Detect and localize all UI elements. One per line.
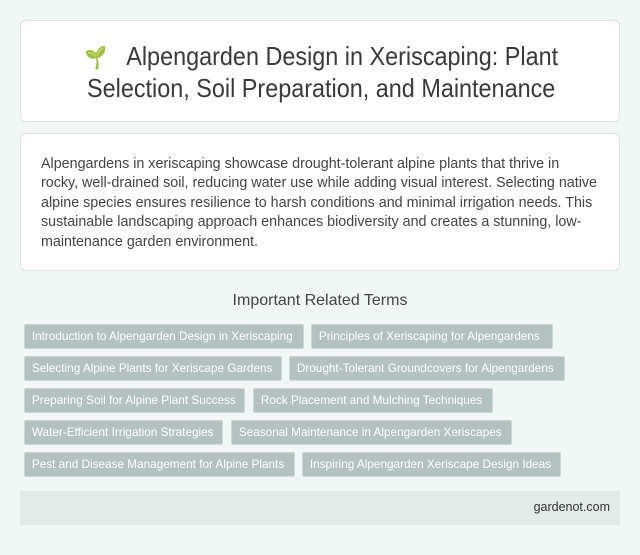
title: Alpengarden Design in Xeriscaping: Plant <box>127 41 558 71</box>
description card <box>20 133 620 271</box>
tag 7: Water-Efficient Irrigation Strategies <box>32 425 214 439</box>
title: Selection, Soil Preparation, and Maintenance <box>87 73 555 103</box>
tag 2: Principles of Xeriscaping for Alpengardens <box>319 329 540 343</box>
tag 6: Rock Placement and Mulching Techniques <box>261 393 482 407</box>
tag 9 <box>24 452 295 477</box>
tag 10 <box>302 452 561 477</box>
tag 6 <box>253 388 493 413</box>
tag 3 <box>24 356 282 381</box>
footer site name: gardenot.com <box>534 500 610 514</box>
tag 4 <box>289 356 565 381</box>
tag 1 <box>24 324 304 349</box>
tag 1: Introduction to Alpengarden Design in Xeriscaping <box>32 329 293 343</box>
description text: rocky, well-drained soil, reducing water use while adding visual interest. Selecting native <box>41 175 597 191</box>
tag 7 <box>24 420 223 445</box>
tag 9: Pest and Disease Management for Alpine Plants <box>32 457 284 471</box>
related terms heading: Important Related Terms <box>233 292 407 309</box>
footer <box>20 491 620 525</box>
description text <box>41 156 597 250</box>
tag 2 <box>311 324 553 349</box>
tag 3: Selecting Alpine Plants for Xeriscape Gardens <box>32 361 272 375</box>
tag 8: Seasonal Maintenance in Alpengarden Xeriscapes <box>239 425 502 439</box>
tag 10: Inspiring Alpengarden Xeriscape Design Ideas <box>310 457 551 471</box>
header card <box>20 20 620 122</box>
description text: alpine species ensures resilience to harsh conditions and minimal irrigation needs. This <box>41 195 592 211</box>
tag 8 <box>231 420 512 445</box>
tag 5 <box>24 388 245 413</box>
description text: Alpengardens in xeriscaping showcase drought-tolerant alpine plants that thrive in <box>41 156 559 172</box>
title <box>85 41 558 103</box>
description text: sustainable landscaping approach enhances biodiversity and creates a stunning, low- <box>41 214 581 230</box>
title: 🌱 <box>85 45 107 70</box>
description text: maintenance garden environment. <box>41 234 258 250</box>
tag 4: Drought-Tolerant Groundcovers for Alpengardens <box>297 361 554 375</box>
tag 5: Preparing Soil for Alpine Plant Success <box>32 393 236 407</box>
